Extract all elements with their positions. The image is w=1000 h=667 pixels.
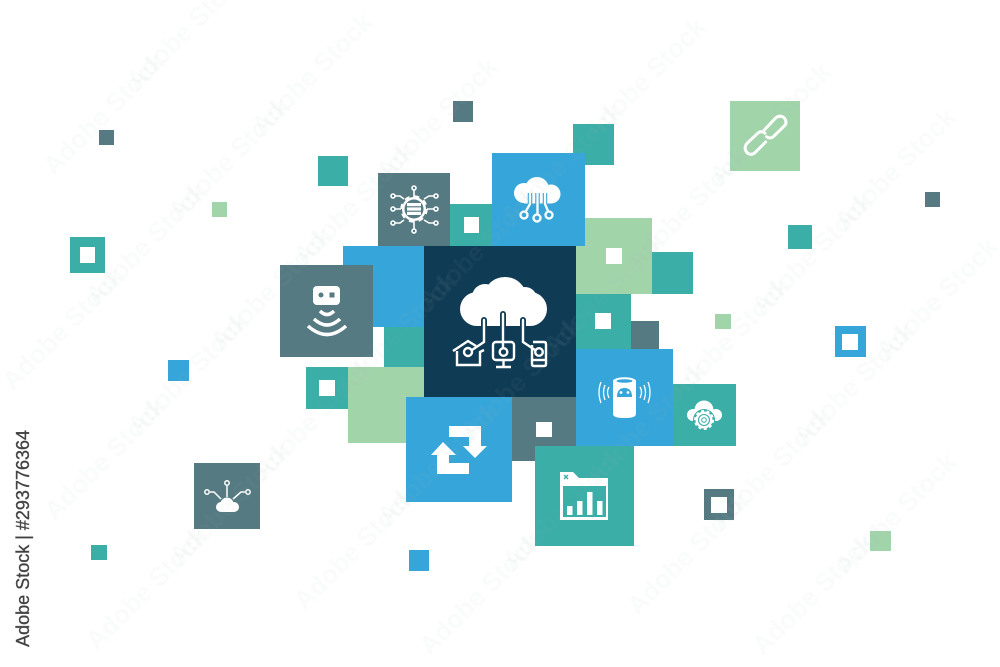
watermark pattern: Adobe Stock [413,526,547,660]
watermark pattern: Adobe Stock [329,266,463,400]
panel: pale green lower left [348,367,424,443]
panel: pale green upper right [576,218,652,294]
panel: teal right of green [652,252,693,294]
wires [484,314,523,330]
square: gray top left [99,130,114,145]
watermark pattern: Adobe Stock [703,56,837,190]
square: teal upper left [318,156,348,186]
watermark pattern: Adobe Stock [162,91,296,225]
square: gray far right [925,192,940,207]
panel: cloud with gear [673,384,736,446]
phone [532,342,546,366]
icon: gear with server and nodes [391,186,438,233]
icon: robot head with waves [308,286,346,334]
panel: chain link [730,101,800,171]
panel: refresh arrows [406,397,512,502]
square: green left [212,202,227,217]
panel: teal beside gear [450,204,492,246]
hollow square: blue right [835,326,866,357]
square: teal bottom left [91,545,107,560]
watermark pattern: Adobe Stock [495,96,629,230]
panel: teal under green [576,294,631,349]
watermark pattern: Adobe Stock [537,226,671,360]
watermark pattern: Adobe Stock [121,306,255,440]
watermark pattern: Adobe Stock [454,311,588,445]
stock id caption: Adobe Stock | #293776364 [13,430,33,647]
icon: folder window with bar chart [560,472,608,520]
watermark pattern: Adobe Stock [704,401,838,535]
watermark pattern: Adobe Stock [621,486,755,620]
panel: plain blue left [343,246,424,327]
square: gray top [453,101,473,122]
watermark pattern: Adobe Stock [288,481,422,615]
watermark pattern: Adobe Stock [79,176,213,310]
square: blue bottom [409,550,429,571]
icon: exchange arrows [431,426,487,474]
house [453,341,484,365]
watermark pattern: Adobe Stock [246,351,380,485]
watermark pattern: Adobe Stock [371,396,505,530]
watermark pattern: Adobe Stock [80,521,214,655]
hollow square: teal left [70,237,105,273]
watermark pattern: Adobe Stock [578,11,712,145]
watermark pattern: Adobe Stock [620,141,754,275]
watermark pattern: Adobe Stock [787,316,921,450]
panel: chart folder [535,446,634,546]
square: blue left [168,360,189,381]
icon: cloud with three nodes [205,481,250,512]
watermark pattern: Adobe Stock [745,186,879,320]
panel: teal top right [573,124,614,165]
panel: cloud network left [194,463,260,529]
watermark pattern: Adobe Stock [204,221,338,355]
watermark pattern: Adobe Stock [579,356,713,490]
panel: robot signal [280,265,373,357]
panel: small gray right [631,321,659,349]
cloud [460,277,547,326]
monitor [493,342,514,367]
panel: cloud network top [492,153,585,246]
icon: chain link [745,116,786,154]
panel: smart speaker [576,349,673,446]
panel: gray lower centre [512,397,576,461]
icon: cloud with circuit [514,177,560,222]
icon: speaker with sound waves [599,377,650,418]
square: green right [715,314,731,329]
watermark pattern: Adobe Stock [746,526,880,660]
icon: cloud connected to home, monitor and phone [453,277,547,367]
watermark pattern: Adobe Stock [662,271,796,405]
panel: gear and server [378,173,450,246]
panel: teal under blue [384,327,424,367]
watermark pattern: Adobe Stock [245,6,379,140]
scattered small squares [91,101,940,571]
watermark pattern: Adobe Stock [370,51,504,185]
panel: teal small left [306,367,348,409]
watermark pattern: Adobe Stock [287,136,421,270]
watermark pattern: Adobe Stock [870,231,1000,365]
watermark pattern: Adobe Stock [163,436,297,570]
hollow square: gray lower right [704,489,734,520]
square: teal right [788,225,812,249]
watermark pattern: Adobe Stock [828,101,962,235]
watermark pattern: Adobe Stock [829,446,963,580]
watermark pattern: Adobe Stock [37,46,171,180]
watermark pattern: Adobe Stock [496,441,630,575]
panel: central dark cloud [424,246,576,397]
icon: cloud gear [687,400,722,431]
watermark pattern: Adobe Stock [412,181,546,315]
watermark pattern: Adobe Stock [38,391,172,525]
square: green bottom right [870,531,891,551]
